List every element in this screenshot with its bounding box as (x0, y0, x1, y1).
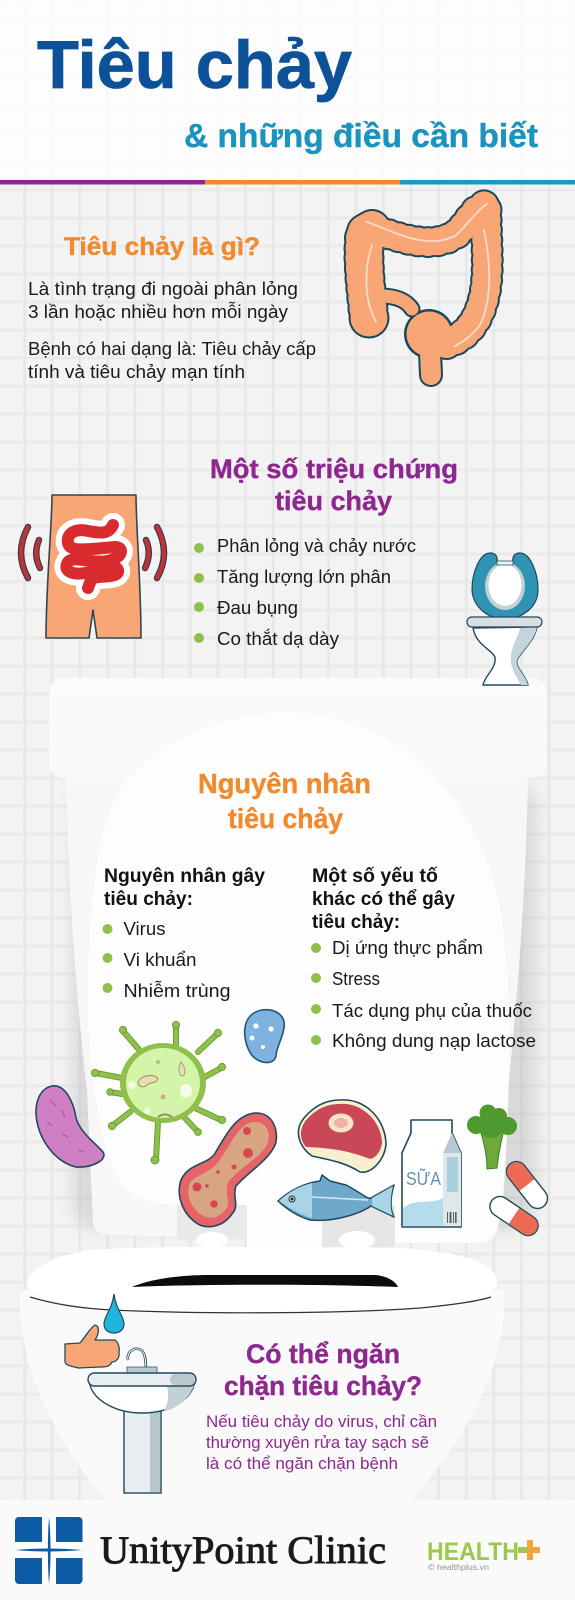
toilet tank lower body (66, 775, 528, 1243)
left column: main causes: Nguyên nhân gây (104, 866, 265, 887)
icon: fish (278, 1175, 394, 1220)
icon: colon (364, 204, 489, 377)
icon: hand (65, 1325, 119, 1368)
icon: sink (88, 1349, 196, 1493)
text block: thường xuyên rửa tay sạch sẽ (206, 1434, 429, 1452)
icon: pills (486, 1158, 552, 1239)
heading: Tiêu chảy là gì? (64, 233, 260, 261)
header color bar (0, 180, 575, 184)
panel: what is diarrhea (28, 233, 316, 382)
heading: Nguyên nhân (198, 768, 371, 799)
footer (0, 1500, 575, 1600)
right column: other factors: Một số yếu tố (312, 866, 438, 887)
logo: HEALTH+: © healthplus.vn (428, 1562, 489, 1572)
text block: definition: Là tình trạng đi ngoài phân lỏng (28, 279, 298, 299)
right column: other factors: Dị ứng thực phẩm (332, 938, 483, 958)
toilet seat (27, 1247, 497, 1313)
heading: Có thể ngăn (246, 1339, 400, 1369)
icon: purple bacterium (36, 1086, 104, 1167)
right column: other factors: khác có thể gây (312, 889, 455, 910)
heading (224, 1339, 422, 1401)
toilet opening (132, 1275, 398, 1287)
toilet base shading (177, 1203, 395, 1247)
icon: red bacterium (179, 1113, 276, 1227)
text block: definition: tính và tiêu chảy mạn tính (28, 362, 245, 382)
title: Tiêu chảy (37, 27, 352, 103)
icon: milk carton (402, 1120, 461, 1227)
right column: other factors: Tác dụng phụ của thuốc (332, 1001, 532, 1021)
left column: main causes: Vi khuẩn (124, 950, 196, 970)
brand name: UnityPoint Clinic (100, 1529, 386, 1572)
symptom list: Đau bụng (217, 598, 298, 618)
left column: main causes: tiêu chảy: (104, 889, 193, 910)
right column: other factors: Stress (332, 969, 380, 989)
text block: là có thể ngăn chặn bệnh (206, 1455, 398, 1473)
text block: definition (28, 279, 316, 382)
heading: tiêu chảy (275, 486, 392, 516)
text block: definition: Bệnh có hai dạng là: Tiêu chảy cấp (28, 339, 316, 359)
toilet bolts (196, 1231, 375, 1249)
icon: water drop (104, 1294, 124, 1333)
panel: prevention (206, 1339, 437, 1473)
toilet bowl (20, 1290, 504, 1500)
icon: small toilet (467, 553, 542, 685)
heading (198, 768, 371, 834)
toilet lid (88, 713, 509, 1248)
panel: symptoms (194, 454, 458, 649)
subtitle: & những điều cần biết (184, 117, 538, 154)
header band (0, 0, 575, 180)
symptom list: Co thắt dạ dày (217, 628, 339, 649)
right column: other factors: Không dung nạp lactose (332, 1031, 536, 1051)
logo: HEALTH+: HEALTH (427, 1538, 519, 1566)
waves (21, 527, 164, 578)
heading: Một số triệu chứng (210, 454, 458, 484)
icon: meat (298, 1100, 386, 1172)
icon: broccoli (467, 1104, 517, 1169)
heading (210, 454, 458, 516)
text block: definition: 3 lần hoặc nhiều hơn mỗi ngày (28, 301, 288, 322)
heading: chặn tiêu chảy? (224, 1371, 422, 1401)
left column: main causes (102, 866, 265, 1001)
text block: Nếu tiêu chảy do virus, chỉ cần (206, 1413, 437, 1431)
text block (206, 1413, 437, 1473)
symptom list: Tăng lượng lớn phân (217, 567, 391, 587)
right column: other factors (311, 866, 536, 1051)
shadow behind toilet tank (72, 780, 537, 1230)
carton label: SỮA (406, 1168, 441, 1189)
icon: virus (91, 1021, 226, 1164)
symptom list: Phân lỏng và chảy nước (217, 536, 416, 556)
heading: tiêu chảy (228, 803, 343, 834)
symptom list (194, 536, 416, 649)
right column: other factors: tiêu chảy: (312, 912, 400, 933)
icon: abdomen with intestines (21, 495, 164, 638)
logo: UnityPoint cross (15, 1517, 82, 1584)
left column: main causes: Nhiễm trùng (124, 980, 230, 1001)
icon: blue cell (245, 1010, 284, 1063)
panel: causes (102, 768, 536, 1051)
left column: main causes: Virus (124, 919, 166, 939)
toilet tank top (50, 678, 546, 778)
